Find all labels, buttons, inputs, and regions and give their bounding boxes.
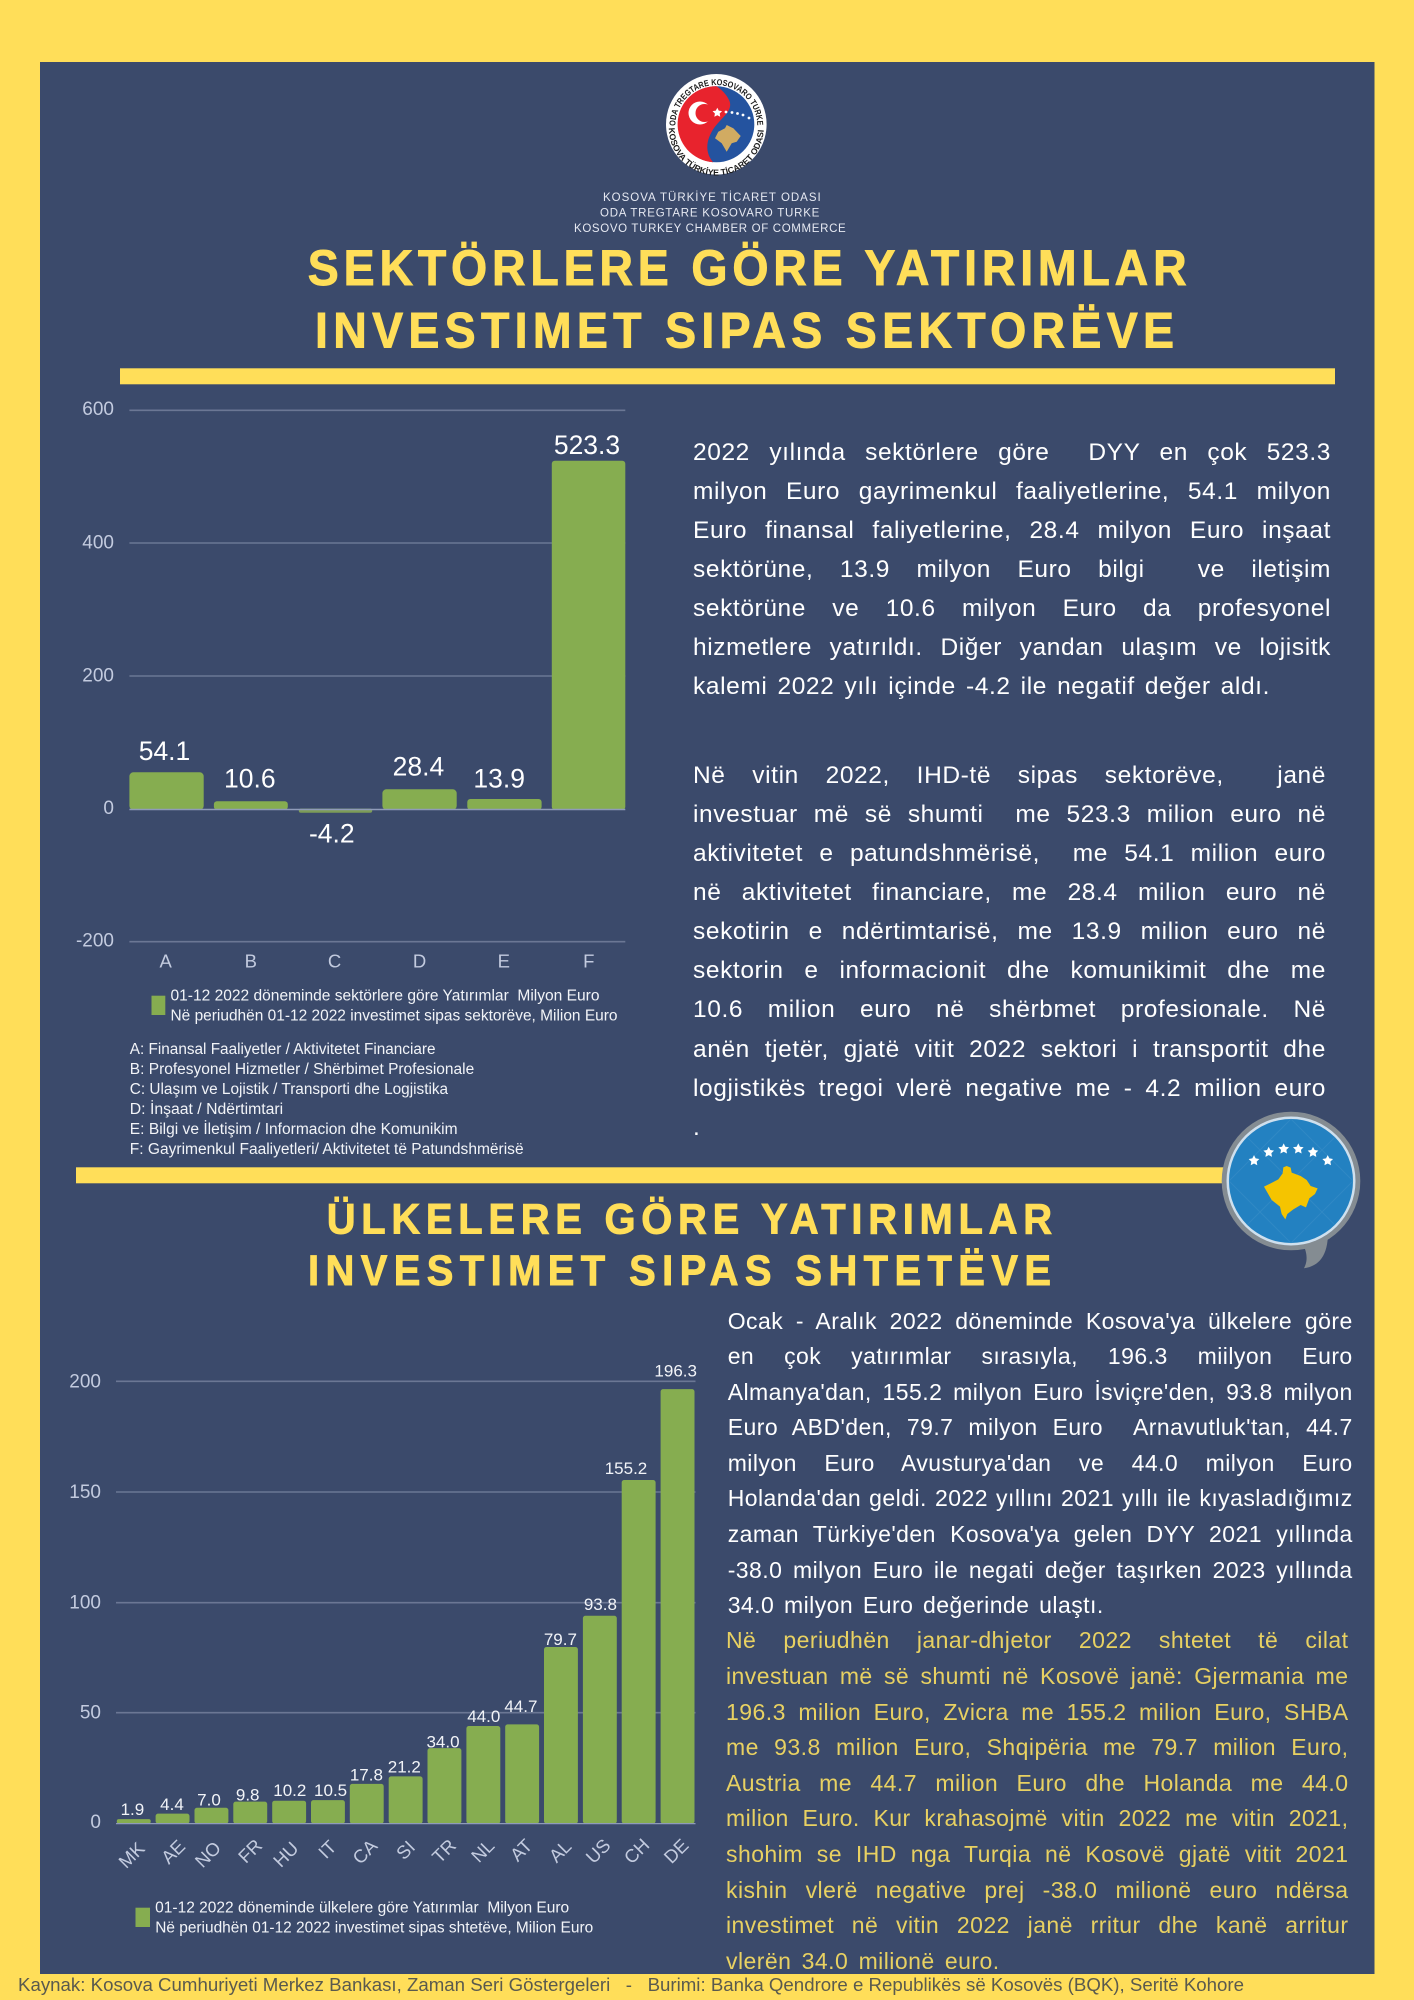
text block: Albanian country summary: investimet në vitin 2022 janë rritur dhe kanë arritur: [726, 1912, 1348, 1938]
logo: chamber of commerce seal: KOSOVA TÜRKİYE TİCARET ODASI: [668, 128, 764, 176]
bar chart: investments by country: 17.8: [350, 1766, 383, 1785]
text block: Albanian sector summary: .: [693, 1114, 700, 1141]
text block: Albanian sector summary: anën tjetër, gjatë vitit 2022 sektori i transportit dhe: [693, 1036, 1326, 1063]
legend: country chart: Në periudhën 01-12 2022 investimet sipas shtetëve, Milion Euro: [155, 1920, 593, 1937]
bar chart: investments by country: NL: [467, 1835, 498, 1866]
text block: Turkish sector summary: milyon Euro gayrimenkul faaliyetlerine, 54.1 milyon: [693, 478, 1331, 505]
legend: sector chart: 01-12 2022 döneminde sektörlere göre Yatırımlar Milyon Euro: [170, 988, 600, 1005]
bar chart: investments by country: 10.2: [273, 1781, 306, 1800]
bar chart: investments by sector: F: [583, 950, 594, 971]
text block: Albanian sector summary: aktivitetet e patundshmërisë, me 54.1 milion euro: [693, 840, 1326, 867]
legend: country chart: [136, 1900, 593, 1937]
bar chart: investments by sector: 10.6: [224, 763, 276, 793]
bar chart: investments by country: 200: [69, 1372, 101, 1393]
bar chart: investments by sector: 400: [82, 532, 114, 553]
title: sector investments: INVESTIMET SIPAS SEKTORËVE: [315, 303, 1174, 359]
bar chart: investments by country: 0: [90, 1812, 101, 1833]
text block: Albanian country summary: Në periudhën janar-dhjetor 2022 shtetet të cilat: [726, 1627, 1348, 1653]
text block: Albanian sector summary: sektorin e informacionit dhe komunikimit dhe me: [693, 957, 1326, 984]
text block: Turkish sector summary: kalemi 2022 yılı içinde -4.2 ile negatif değer aldı.: [693, 673, 1270, 700]
bar chart: investments by country: SI: [392, 1836, 419, 1864]
text block: Turkish country summary: en çok yatırımlar sırasıyla, 196.3 miilyon Euro: [728, 1343, 1353, 1369]
bar chart: investments by country: TR: [428, 1835, 460, 1867]
text block: Albanian sector summary: Në vitin 2022, IHD-të sipas sektorëve, janë: [693, 762, 1326, 789]
bar chart: investments by sector: 13.9: [473, 763, 525, 793]
logo: chamber of commerce seal: [666, 74, 767, 176]
bar chart: investments by country: 4.4: [160, 1795, 184, 1814]
bar chart: investments by sector: C: [328, 950, 341, 971]
title: country investments: INVESTIMET SIPAS SHTETËVE: [308, 1246, 1051, 1294]
organisation names: KOSOVO TURKEY CHAMBER OF COMMERCE: [574, 223, 846, 235]
bar chart: investments by sector: A: [160, 950, 173, 971]
bar chart: investments by country: 44.0: [467, 1707, 500, 1726]
bar chart: investments by sector: [76, 399, 625, 971]
text block: Albanian country summary: milion Euro. Kur krahasojmë vitin 2022 me vitin 2021,: [726, 1805, 1348, 1831]
sector key list: [130, 1041, 524, 1158]
icon: Kosovo flag badge: [1222, 1112, 1360, 1268]
organisation names: ODA TREGTARE KOSOVARO TURKE: [600, 207, 820, 219]
bar chart: investments by country: AE: [157, 1836, 189, 1868]
bar chart: investments by country: CA: [348, 1835, 382, 1868]
bar chart: investments by sector: -4.2: [309, 819, 355, 849]
bar chart: investments by country: 100: [69, 1593, 101, 1614]
title: country investments: [308, 1194, 1052, 1294]
text block: Turkish country summary: milyon Euro Avusturya'dan ve 44.0 milyon Euro: [728, 1450, 1353, 1476]
text block: Albanian country summary: investuan më së shumti në Kosovë janë: Gjermania me: [726, 1663, 1348, 1689]
text block: Turkish country summary: zaman Türkiye'den Kosova'ya gelen DYY 2021 yıllında: [728, 1521, 1353, 1547]
text block: Albanian country summary: Austria me 44.7 milion Euro dhe Holanda me 44.0: [726, 1770, 1348, 1796]
bar chart: investments by country: 150: [69, 1482, 101, 1503]
bar chart: investments by country: 1.9: [121, 1800, 144, 1819]
text block: Albanian country summary: shohim se IHD nga Turqia në Kosovë gjatë vitit 2021: [726, 1841, 1348, 1867]
bar chart: investments by country: CH: [620, 1834, 653, 1868]
bar chart: investments by country: US: [581, 1834, 614, 1867]
text block: Turkish sector summary: sektörüne ve 10.6 milyon Euro da profesyonel: [693, 595, 1331, 622]
bar chart: investments by sector: 200: [82, 665, 114, 686]
title: sector investments: SEKTÖRLERE GÖRE YATIRIMLAR: [308, 240, 1187, 296]
sector key list: A: Finansal Faaliyetler / Aktivitetet Financiare: [130, 1041, 436, 1058]
text block: Albanian sector summary: 10.6 milion euro në shërbmet profesionale. Në: [693, 996, 1326, 1023]
bar chart: investments by country: DE: [659, 1834, 692, 1867]
text block: Albanian sector summary: [693, 762, 1326, 1141]
text block: Albanian sector summary: në aktivitetet financiare, me 28.4 milion euro në: [693, 879, 1326, 906]
bar chart: investments by sector: B: [245, 950, 257, 971]
legend: sector chart: Në periudhën 01-12 2022 investimet sipas sektorëve, Milion Euro: [170, 1008, 618, 1025]
text block: Turkish sector summary: sektörüne, 13.9 milyon Euro bilgi ve iletişim: [693, 556, 1331, 583]
bar chart: investments by country: 44.7: [504, 1697, 537, 1716]
bar chart: investments by country: IT: [314, 1836, 340, 1863]
bar chart: investments by country: AT: [506, 1835, 536, 1865]
bar chart: investments by country: 9.8: [236, 1786, 260, 1805]
source footer: Kaynak: Kosova Cumhuriyeti Merkez Bankası, Zaman Seri Göstergeleri - Burimi: Banka Qendrore e Republikës së Kosovës (BQK), Seritë Kohore: [18, 1974, 1244, 1995]
text block: Turkish country summary: Euro ABD'den, 79.7 milyon Euro Arnavutluk'tan, 44.7: [728, 1414, 1353, 1440]
bar chart: investments by country: 21.2: [388, 1757, 421, 1776]
text block: Albanian country summary: 196.3 milion Euro, Zvicra me 155.2 milion Euro, SHBA: [726, 1698, 1348, 1724]
bar chart: investments by sector: 54.1: [139, 736, 190, 766]
legend: sector chart: [152, 988, 618, 1025]
text block: Albanian country summary: me 93.8 milion Euro, Shqipëria me 79.7 milion Euro,: [726, 1734, 1348, 1760]
text block: Turkish country summary: 34.0 milyon Euro değerinde ulaştı.: [728, 1592, 1104, 1618]
bar chart: investments by country: FR: [234, 1835, 266, 1867]
bar chart: investments by country: NO: [191, 1837, 225, 1872]
text block: Turkish country summary: Ocak - Aralık 2022 döneminde Kosova'ya ülkelere göre: [728, 1308, 1353, 1334]
bar chart: investments by country: 7.0: [197, 1791, 221, 1810]
bar chart: investments by country: [69, 1362, 697, 1872]
bar chart: investments by country: 10.5: [314, 1781, 347, 1800]
organisation names: [574, 191, 846, 235]
bar chart: investments by sector: E: [498, 950, 510, 971]
bar chart: investments by sector: 0: [103, 798, 114, 819]
bar chart: investments by sector: 28.4: [393, 751, 444, 781]
sector key list: B: Profesyonel Hizmetler / Shërbimet Profesionale: [130, 1061, 474, 1078]
bar chart: investments by country: HU: [269, 1837, 303, 1871]
sector key list: F: Gayrimenkul Faaliyetleri/ Aktivitetet të Patundshmërisë: [130, 1141, 524, 1158]
title: sector investments: [308, 240, 1187, 359]
organisation names: KOSOVA TÜRKİYE TİCARET ODASI: [603, 191, 821, 204]
divider bar: middle: [76, 1167, 1226, 1183]
bar chart: investments by country: MK: [114, 1837, 149, 1872]
bar chart: investments by sector: D: [413, 950, 426, 971]
title: country investments: ÜLKELERE GÖRE YATIRIMLAR: [327, 1194, 1052, 1243]
sector key list: E: Bilgi ve İletişim / Informacion dhe Komunikim: [130, 1120, 458, 1138]
text block: Albanian country summary: [726, 1627, 1348, 1974]
bar chart: investments by country: 93.8: [584, 1595, 617, 1614]
bar chart: investments by country: 50: [80, 1703, 101, 1724]
bar chart: investments by country: 196.3: [654, 1362, 697, 1381]
divider bar: top: [120, 368, 1335, 384]
bar chart: investments by country: 155.2: [605, 1459, 647, 1478]
text block: Turkish sector summary: [693, 439, 1331, 700]
text block: Turkish country summary: [728, 1308, 1353, 1618]
text block: Albanian sector summary: sekotirin e ndërtimtarisë, me 13.9 milion euro në: [693, 918, 1326, 945]
text block: Turkish country summary: Almanya'dan, 155.2 milyon Euro İsviçre'den, 93.8 milyon: [728, 1379, 1353, 1405]
text block: Turkish country summary: -38.0 milyon Euro ile negati değer taşırken 2023 yıllında: [728, 1557, 1353, 1583]
bar chart: investments by country: 79.7: [544, 1630, 577, 1649]
bar chart: investments by sector: -200: [76, 931, 114, 952]
logo: chamber of commerce seal: ODA TREGTARE KOSOVARO TURKE: [670, 79, 764, 126]
text block: Turkish sector summary: Euro finansal faliyetlerine, 28.4 milyon Euro inşaat: [693, 517, 1331, 544]
text block: Albanian sector summary: logjistikës tregoi vlerë negative me - 4.2 milion euro: [693, 1075, 1326, 1102]
text block: Albanian country summary: kishin vlerë negative prej -38.0 milionë euro ndërsa: [726, 1877, 1348, 1903]
bar chart: investments by sector: 600: [82, 399, 114, 420]
text block: Albanian country summary: vlerën 34.0 milionë euro.: [726, 1948, 1000, 1974]
text block: Turkish sector summary: hizmetlere yatırıldı. Diğer yandan ulaşım ve lojisitk: [693, 634, 1331, 661]
text block: Albanian sector summary: investuar më së shumti me 523.3 milion euro në: [693, 801, 1326, 828]
text block: Turkish sector summary: 2022 yılında sektörlere göre DYY en çok 523.3: [693, 439, 1331, 466]
sector key list: D: İnşaat / Ndërtimtari: [130, 1100, 283, 1118]
bar chart: investments by sector: 523.3: [554, 430, 620, 460]
legend: country chart: 01-12 2022 döneminde ülkelere göre Yatırımlar Milyon Euro: [155, 1900, 569, 1917]
bar chart: investments by country: 34.0: [426, 1732, 460, 1751]
text block: Turkish country summary: Holanda'dan geldi. 2022 yıllını 2021 yıllı ile kıyasladığımız: [728, 1485, 1353, 1511]
sector key list: C: Ulaşım ve Lojistik / Transporti dhe Logjistika: [130, 1081, 448, 1098]
bar chart: investments by country: AL: [545, 1836, 575, 1866]
